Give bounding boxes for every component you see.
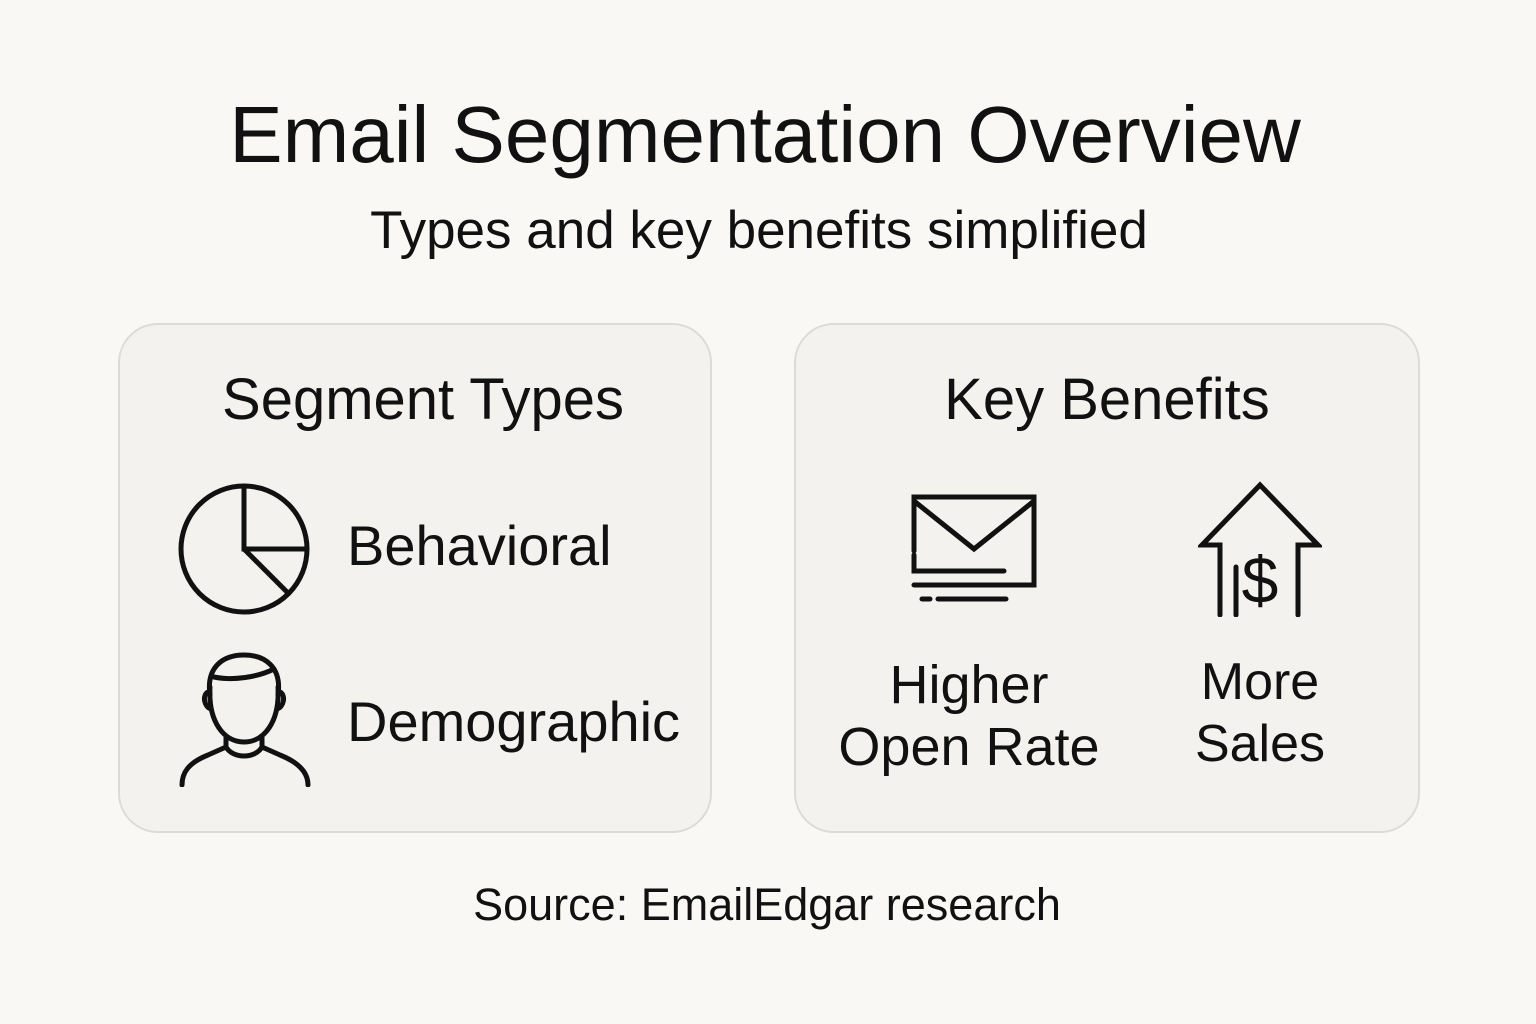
subtitle: Types and key benefits simplified bbox=[370, 201, 1148, 260]
panel: key benefits bbox=[794, 323, 1420, 833]
heading: segment types: Segment Types bbox=[222, 367, 624, 432]
label: demographic: Demographic bbox=[347, 690, 680, 753]
label: more sales bbox=[1195, 653, 1325, 773]
source note: Source: EmailEdgar research bbox=[473, 879, 1061, 930]
label: behavioral: Behavioral bbox=[347, 514, 612, 577]
label: more sales: More bbox=[1201, 653, 1319, 711]
icon: house dollar: $ bbox=[1242, 543, 1278, 617]
label: higher open rate bbox=[838, 655, 1100, 777]
icon: house dollar bbox=[1198, 482, 1322, 617]
panel: segment types bbox=[118, 323, 712, 833]
icon: pie chart bbox=[178, 484, 310, 614]
heading: key benefits: Key Benefits bbox=[944, 367, 1270, 432]
label: higher open rate: Higher bbox=[889, 655, 1049, 715]
label: higher open rate: Open Rate bbox=[838, 717, 1100, 777]
icon: person bbox=[180, 652, 310, 787]
label: more sales: Sales bbox=[1195, 715, 1325, 773]
title: Email Segmentation Overview bbox=[229, 90, 1301, 179]
icon: email bbox=[912, 494, 1036, 602]
